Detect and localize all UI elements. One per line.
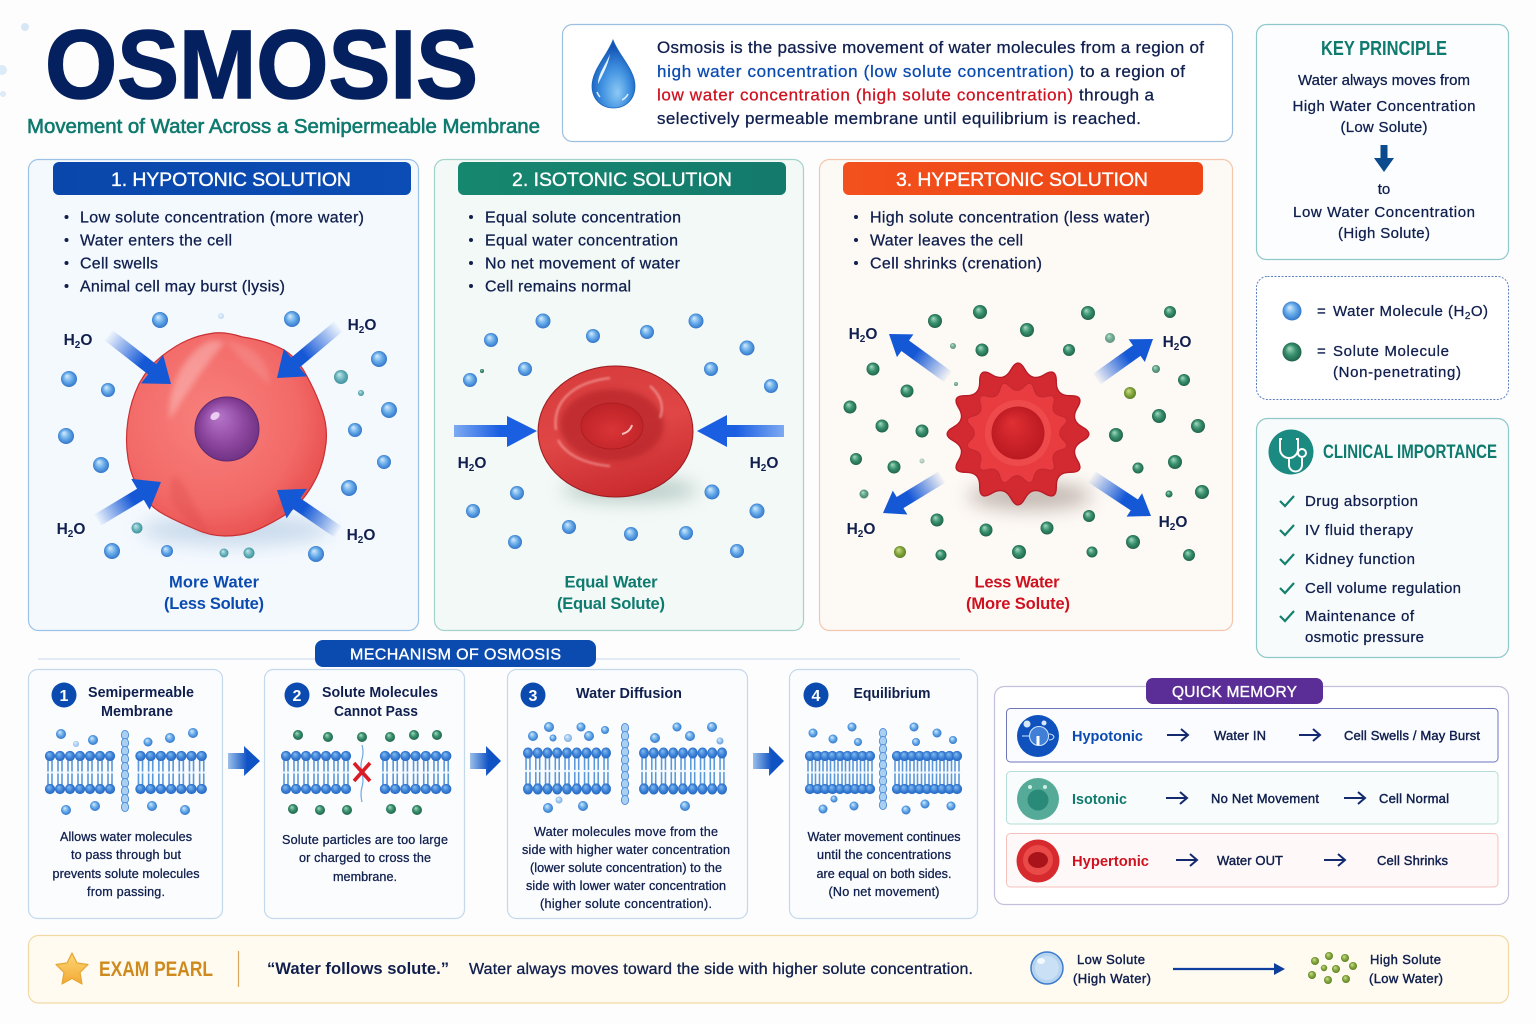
number badge xyxy=(284,682,310,708)
icon: low solute sphere xyxy=(1031,952,1063,984)
icon: water drop xyxy=(592,40,635,108)
panel: legend: = xyxy=(1317,303,1326,320)
caption: More Water xyxy=(169,574,260,592)
row: hypotonic: Water IN xyxy=(1214,728,1266,743)
H2O labels: O xyxy=(863,521,875,538)
step text: or charged to cross the xyxy=(299,851,431,865)
H2O labels: 2 xyxy=(858,529,864,540)
arrows: water in xyxy=(88,313,350,547)
H2O labels: 2 xyxy=(1174,342,1180,353)
caption: Equal Water xyxy=(564,574,658,592)
H2O labels: H xyxy=(750,455,761,472)
H2O labels xyxy=(57,317,376,546)
checklist: Cell volume regulation xyxy=(1305,580,1461,597)
arrow: down xyxy=(1374,145,1394,172)
H2O labels: H xyxy=(849,326,860,343)
panel: key principle: (Low Solute) xyxy=(1340,119,1428,136)
icon: star xyxy=(56,953,88,984)
heading: hypotonic xyxy=(53,162,411,195)
step text: side with lower water concentration xyxy=(526,879,726,893)
panel: quick memory xyxy=(994,678,1508,904)
step text: prevents solute molecules xyxy=(52,867,200,881)
step text: Water molecules move from the xyxy=(534,825,718,839)
arrows: balanced xyxy=(454,415,784,447)
panel: key principle: Water always moves from xyxy=(1298,72,1470,89)
panel: exam pearl xyxy=(28,936,1508,1003)
water molecules xyxy=(463,314,778,558)
caption: (Equal Solute) xyxy=(557,595,665,613)
panel: exam pearl: Low Solute xyxy=(1077,952,1145,967)
H2O labels: 2 xyxy=(358,535,364,546)
checklist: osmotic pressure xyxy=(1305,629,1424,646)
step text: from passing. xyxy=(87,885,165,899)
H2O labels: 2 xyxy=(469,463,475,474)
panel: exam pearl: (High Water) xyxy=(1073,971,1151,986)
H2O labels: H xyxy=(64,332,75,349)
row: hypertonic: Cell Shrinks xyxy=(1377,853,1448,868)
definition text: through a xyxy=(1079,86,1155,104)
step title xyxy=(322,685,438,720)
bullets: No net movement of water xyxy=(485,256,681,272)
heading: isotonic: 2. ISOTONIC SOLUTION xyxy=(512,169,732,191)
number badge: 3 xyxy=(529,688,538,705)
checklist: Drug absorption xyxy=(1305,493,1418,510)
icon: crenated cell xyxy=(947,363,1092,510)
icon: normal red blood cell xyxy=(538,366,698,502)
caption: Less Water xyxy=(974,574,1060,592)
bullets: High solute concentration (less water) xyxy=(870,210,1150,226)
H2O labels: O xyxy=(474,455,486,472)
H2O labels: O xyxy=(865,326,877,343)
subtitle: Movement of Water Across a Semipermeable Membrane xyxy=(27,116,540,138)
H2O labels: 2 xyxy=(359,325,365,336)
panel: legend xyxy=(1256,276,1508,400)
step title: Solute Molecules xyxy=(322,685,438,701)
H2O labels: O xyxy=(1175,514,1187,531)
checklist: IV fluid therapy xyxy=(1305,522,1414,539)
checklist: Maintenance of xyxy=(1305,608,1415,625)
H2O labels xyxy=(458,455,778,474)
H2O labels: H xyxy=(1159,514,1170,531)
panel: legend: = xyxy=(1317,343,1326,360)
step title: Membrane xyxy=(101,704,173,720)
step title xyxy=(88,685,194,720)
H2O labels: 2 xyxy=(761,463,767,474)
panel: key principle xyxy=(1256,24,1508,260)
heading: isotonic xyxy=(458,162,786,195)
caption xyxy=(557,574,665,613)
panel: exam pearl: “Water follows solute.” xyxy=(267,959,449,978)
step text: to pass through but xyxy=(71,848,182,862)
arrow: step 2 to 3 xyxy=(470,746,501,776)
row: hypertonic xyxy=(1006,834,1498,887)
caption: (More Solute) xyxy=(966,595,1070,613)
step text xyxy=(808,830,960,899)
definition text: to a region of xyxy=(1080,62,1185,81)
panel: exam pearl: Water always moves toward the side with higher solute concentration. xyxy=(469,961,973,978)
caption xyxy=(164,574,264,613)
number badge: 1 xyxy=(60,688,69,705)
bullets: Animal cell may burst (lysis) xyxy=(80,278,285,296)
step text: (higher solute concentration). xyxy=(540,897,712,911)
panel: legend: O) xyxy=(1471,303,1488,320)
bullets xyxy=(469,210,681,296)
step text: membrane. xyxy=(333,870,397,884)
step text: Water movement continues xyxy=(808,830,960,844)
diagram: equilibrium xyxy=(805,722,962,814)
bullets: Equal water concentration xyxy=(485,232,678,250)
panel: key principle: High Water Concentration xyxy=(1292,98,1476,115)
step title: Water Diffusion xyxy=(576,686,682,702)
number badge xyxy=(52,682,76,708)
panel: step 1 xyxy=(28,670,222,918)
bullets: Cell swells xyxy=(80,256,158,272)
panel: hypertonic xyxy=(820,160,1232,630)
H2O labels: H xyxy=(347,527,358,544)
caption: (Less Solute) xyxy=(164,595,264,613)
definition text: Osmosis is the passive movement of water molecules from a region of xyxy=(657,38,1204,57)
icon: red x xyxy=(354,763,370,781)
H2O labels: O xyxy=(364,317,376,334)
bullets xyxy=(854,210,1150,272)
bullets: Equal solute concentration xyxy=(485,210,681,226)
step text xyxy=(52,830,200,899)
panel: definition xyxy=(562,24,1232,142)
step text xyxy=(522,825,730,911)
definition text xyxy=(657,38,1204,128)
arrow: low to high solute xyxy=(1173,968,1278,970)
H2O labels: 2 xyxy=(75,340,81,351)
panel: key principle: Low Water Concentration xyxy=(1293,204,1475,221)
step text: (No net movement) xyxy=(828,885,940,899)
row: isotonic: Cell Normal xyxy=(1379,791,1449,806)
H2O labels: O xyxy=(1179,334,1191,351)
H2O labels: H xyxy=(57,521,68,538)
heading: hypertonic: 3. HYPERTONIC SOLUTION xyxy=(896,169,1148,191)
panel: legend: Solute Molecule xyxy=(1333,343,1449,360)
arrow: step 1 to 2 xyxy=(228,746,260,776)
step text: side with higher water concentration xyxy=(522,843,730,857)
H2O labels: H xyxy=(847,521,858,538)
number badge: 2 xyxy=(293,688,302,705)
panel: legend: (Non-penetrating) xyxy=(1333,364,1461,381)
panel: key principle: to xyxy=(1378,181,1390,198)
bullets: Water leaves the cell xyxy=(870,232,1023,250)
icon: swollen cell xyxy=(126,333,330,546)
checklist xyxy=(1280,493,1461,646)
panel: exam pearl: (Low Water) xyxy=(1369,971,1443,986)
H2O labels: O xyxy=(766,455,778,472)
panel: step 4 xyxy=(790,670,978,918)
bullets xyxy=(64,210,364,296)
arrows: water out xyxy=(876,323,1161,528)
H2O labels: O xyxy=(80,332,92,349)
icon: high solute dots xyxy=(1308,952,1357,984)
panel: key principle: (High Solute) xyxy=(1338,225,1430,242)
row: hypotonic xyxy=(1006,708,1498,762)
H2O labels: H xyxy=(1163,334,1174,351)
heading: hypotonic: 1. HYPOTONIC SOLUTION xyxy=(111,169,351,191)
row: hypotonic: Hypotonic xyxy=(1072,728,1143,745)
step text: (lower solute concentration) to the xyxy=(530,861,722,875)
checklist: Kidney function xyxy=(1305,551,1415,568)
row: isotonic: No Net Movement xyxy=(1211,791,1319,806)
bullets: Cell remains normal xyxy=(485,278,631,296)
H2O labels xyxy=(847,326,1191,540)
heading: mechanism: MECHANISM OF OSMOSIS xyxy=(350,646,561,664)
panel: clinical importance xyxy=(1256,418,1508,658)
heading: quick memory xyxy=(1146,678,1323,704)
row: hypertonic: Hypertonic xyxy=(1072,853,1149,870)
H2O labels: O xyxy=(363,527,375,544)
panel: step 3 xyxy=(508,670,748,918)
H2O labels: H xyxy=(348,317,359,334)
panel: step 2 xyxy=(264,670,464,918)
definition text: high water concentration (low solute concentration) xyxy=(657,62,1074,81)
number badge: 4 xyxy=(812,688,821,705)
H2O labels: O xyxy=(73,521,85,538)
row: hypertonic: Water OUT xyxy=(1217,853,1283,868)
row: isotonic xyxy=(1006,772,1498,824)
panel: key principle: KEY PRINCIPLE xyxy=(1321,38,1447,60)
water molecules xyxy=(58,311,397,562)
H2O labels: 2 xyxy=(860,334,866,345)
bullets: Water enters the cell xyxy=(80,232,232,250)
panel: hypotonic xyxy=(28,160,418,630)
step text: Solute particles are too large xyxy=(282,833,448,847)
number badge xyxy=(804,682,828,708)
diagram: water crossing xyxy=(523,722,727,813)
heading: hypertonic xyxy=(843,162,1203,195)
step title: Cannot Pass xyxy=(334,704,418,720)
panel: isotonic xyxy=(434,160,804,630)
step title: Semipermeable xyxy=(88,685,194,701)
H2O labels: 2 xyxy=(68,529,74,540)
arrow: step 3 to 4 xyxy=(753,746,784,776)
step title: Equilibrium xyxy=(854,686,930,702)
heading: mechanism xyxy=(315,640,596,667)
panel: exam pearl: EXAM PEARL xyxy=(99,958,213,981)
panel: legend: 2 xyxy=(1465,311,1471,322)
number badge xyxy=(520,682,546,708)
heading: quick memory: QUICK MEMORY xyxy=(1172,684,1297,701)
row: isotonic: Isotonic xyxy=(1072,791,1127,808)
H2O labels: H xyxy=(458,455,469,472)
row: hypotonic: Cell Swells / May Burst xyxy=(1344,728,1480,743)
caption xyxy=(966,574,1070,613)
panel: legend: Water Molecule (H xyxy=(1333,303,1464,320)
step text: until the concentrations xyxy=(817,848,951,862)
panel: exam pearl: High Solute xyxy=(1370,952,1441,967)
step text: are equal on both sides. xyxy=(816,867,952,881)
bullets: Low solute concentration (more water) xyxy=(80,210,364,226)
title: OSMOSIS xyxy=(45,10,478,119)
nucleus xyxy=(195,397,259,461)
solute molecules xyxy=(844,305,1209,561)
bullets: Cell shrinks (crenation) xyxy=(870,256,1042,272)
H2O labels: 2 xyxy=(1170,522,1176,533)
diagram: membrane blocked xyxy=(281,730,451,815)
icon: stethoscope xyxy=(1268,430,1314,474)
step text: Allows water molecules xyxy=(60,830,192,844)
step text xyxy=(282,833,448,884)
definition text: low water concentration (high solute concentration) xyxy=(657,86,1073,104)
diagram: membrane xyxy=(45,728,207,815)
definition text: selectively permeable membrane until equilibrium is reached. xyxy=(657,109,1141,128)
